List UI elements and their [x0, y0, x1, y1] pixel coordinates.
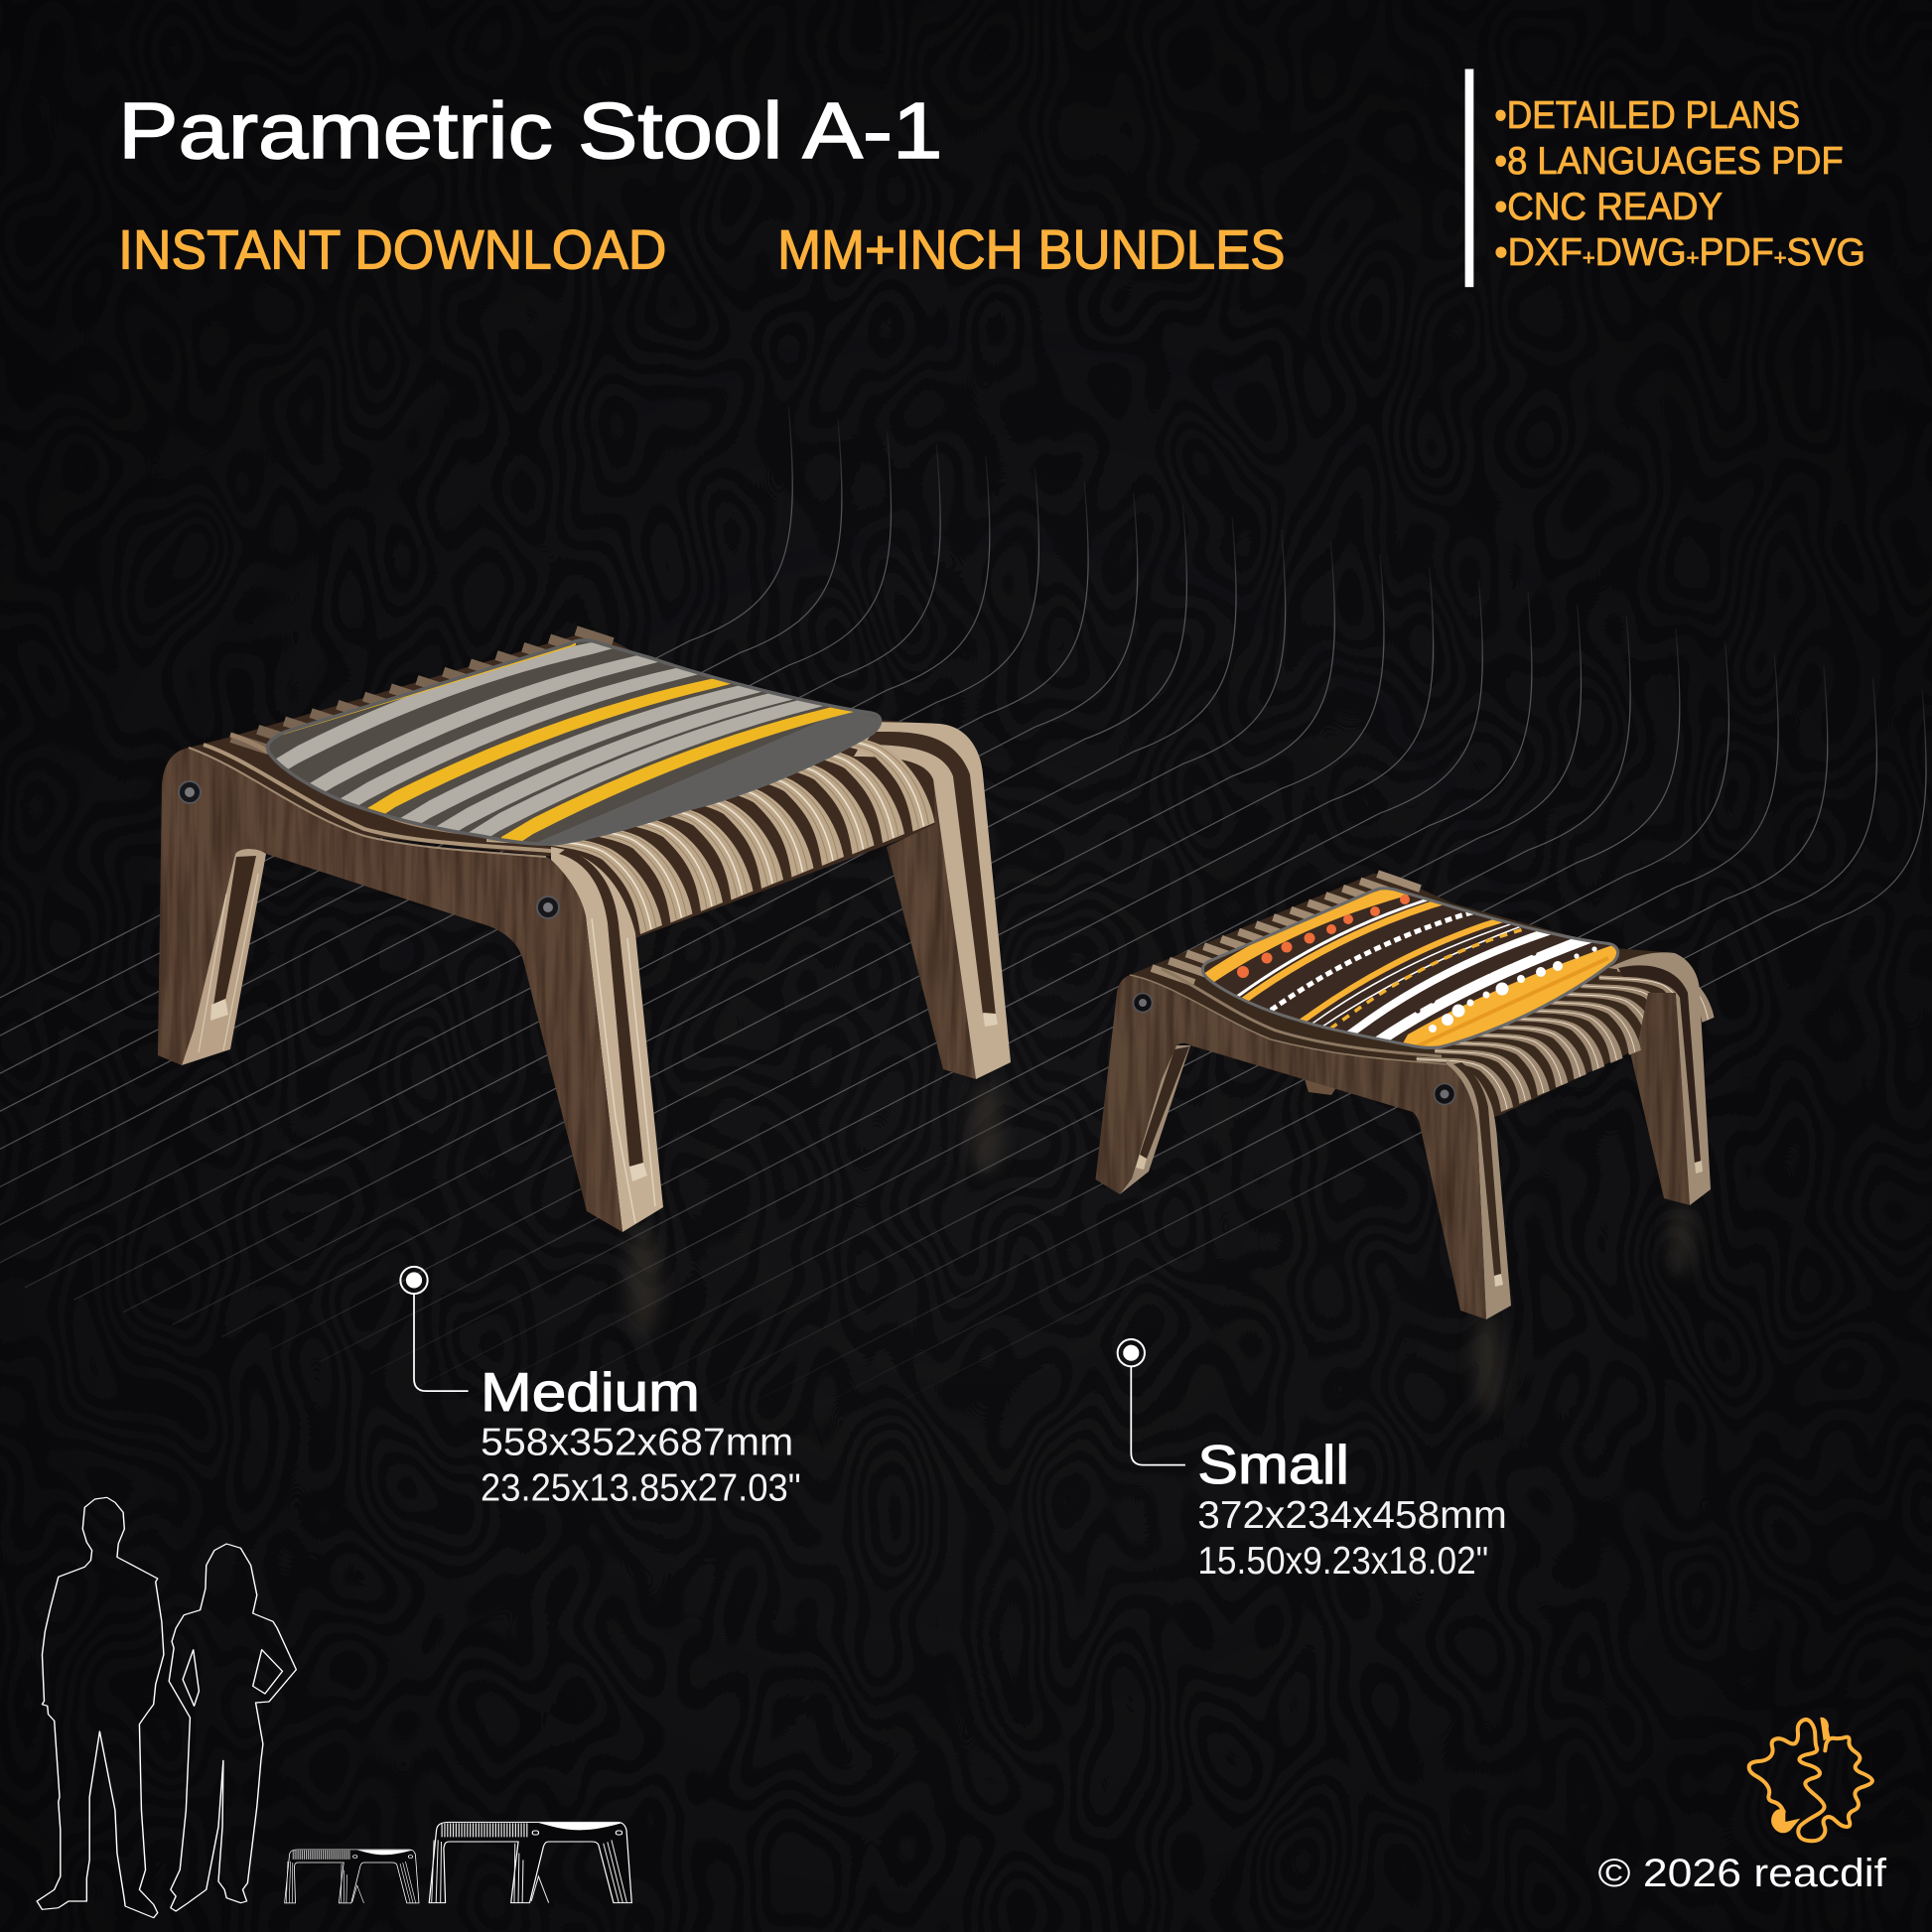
medium stool	[158, 630, 1011, 1232]
seat underlay	[189, 630, 950, 938]
panel top bevel	[1130, 975, 1447, 1064]
man outline	[37, 1497, 164, 1918]
cushion: patterned orange and brown	[1201, 887, 1620, 1049]
callout: small	[1118, 1339, 1507, 1583]
layered bands under cushion	[1162, 969, 1442, 1056]
background perspective grid lines	[0, 407, 1926, 1472]
dimensions: medium: 558x352x687mm	[481, 1422, 793, 1464]
marker: medium	[400, 1267, 469, 1391]
feature list	[1494, 94, 1865, 274]
dimensions: medium: 23.25x13.85x27.03"	[481, 1467, 801, 1510]
plywood ribs	[1417, 1000, 1641, 1112]
front leg plywood edge	[551, 847, 663, 1232]
small stool outline	[285, 1850, 419, 1903]
vertical divider	[1465, 69, 1473, 287]
subheading: instant download: INSTANT DOWNLOAD	[118, 218, 666, 281]
dimensions: medium	[481, 1422, 801, 1510]
feature list: •8 LANGUAGES PDF	[1494, 140, 1844, 183]
plywood ribs	[486, 731, 935, 934]
layered bands under cushion	[204, 735, 561, 852]
label: small: Small	[1197, 1435, 1349, 1495]
front side panel	[1096, 975, 1486, 1319]
seat underlay	[1130, 874, 1678, 1122]
floor reflections	[625, 1080, 1694, 1414]
left leg plywood edge	[1120, 1045, 1190, 1194]
rib ends along back-left edge	[1152, 874, 1420, 983]
small stool	[1096, 874, 1714, 1319]
dimensions: small: 15.50x9.23x18.02"	[1197, 1540, 1488, 1583]
rear ribs	[1563, 967, 1714, 1046]
feature list: •DXF+DWG+PDF+SVG	[1494, 231, 1865, 274]
marker: small	[1118, 1339, 1185, 1465]
label: medium: Medium	[481, 1362, 700, 1423]
subheading: mm and inch bundles: MM+INCH BUNDLES	[777, 218, 1285, 281]
bolts	[1134, 993, 1455, 1104]
bolts	[179, 781, 559, 918]
dimensions: small: 372x234x458mm	[1197, 1494, 1507, 1537]
front leg plywood edge	[1447, 1060, 1511, 1319]
cushion: grey and yellow stripes	[258, 632, 894, 855]
panel top bevel	[189, 748, 546, 857]
woman outline	[169, 1544, 296, 1911]
rib ends along back-left edge	[231, 630, 613, 750]
feature list: •CNC READY	[1494, 186, 1723, 228]
logo	[1749, 1718, 1872, 1841]
dimensions: small	[1197, 1494, 1507, 1583]
left leg plywood edge	[182, 849, 266, 1065]
back leg	[854, 722, 1011, 1079]
title: Parametric Stool A-1	[118, 86, 942, 175]
back leg	[1608, 952, 1711, 1205]
front side panel	[158, 748, 622, 1232]
hidden fourth leg	[1305, 1079, 1337, 1095]
copyright: © 2026 reacdif	[1598, 1852, 1887, 1895]
scale comparison figures	[37, 1497, 631, 1918]
feature list: •DETAILED PLANS	[1494, 94, 1800, 137]
medium stool outline	[429, 1822, 631, 1903]
callout: medium	[400, 1267, 801, 1510]
